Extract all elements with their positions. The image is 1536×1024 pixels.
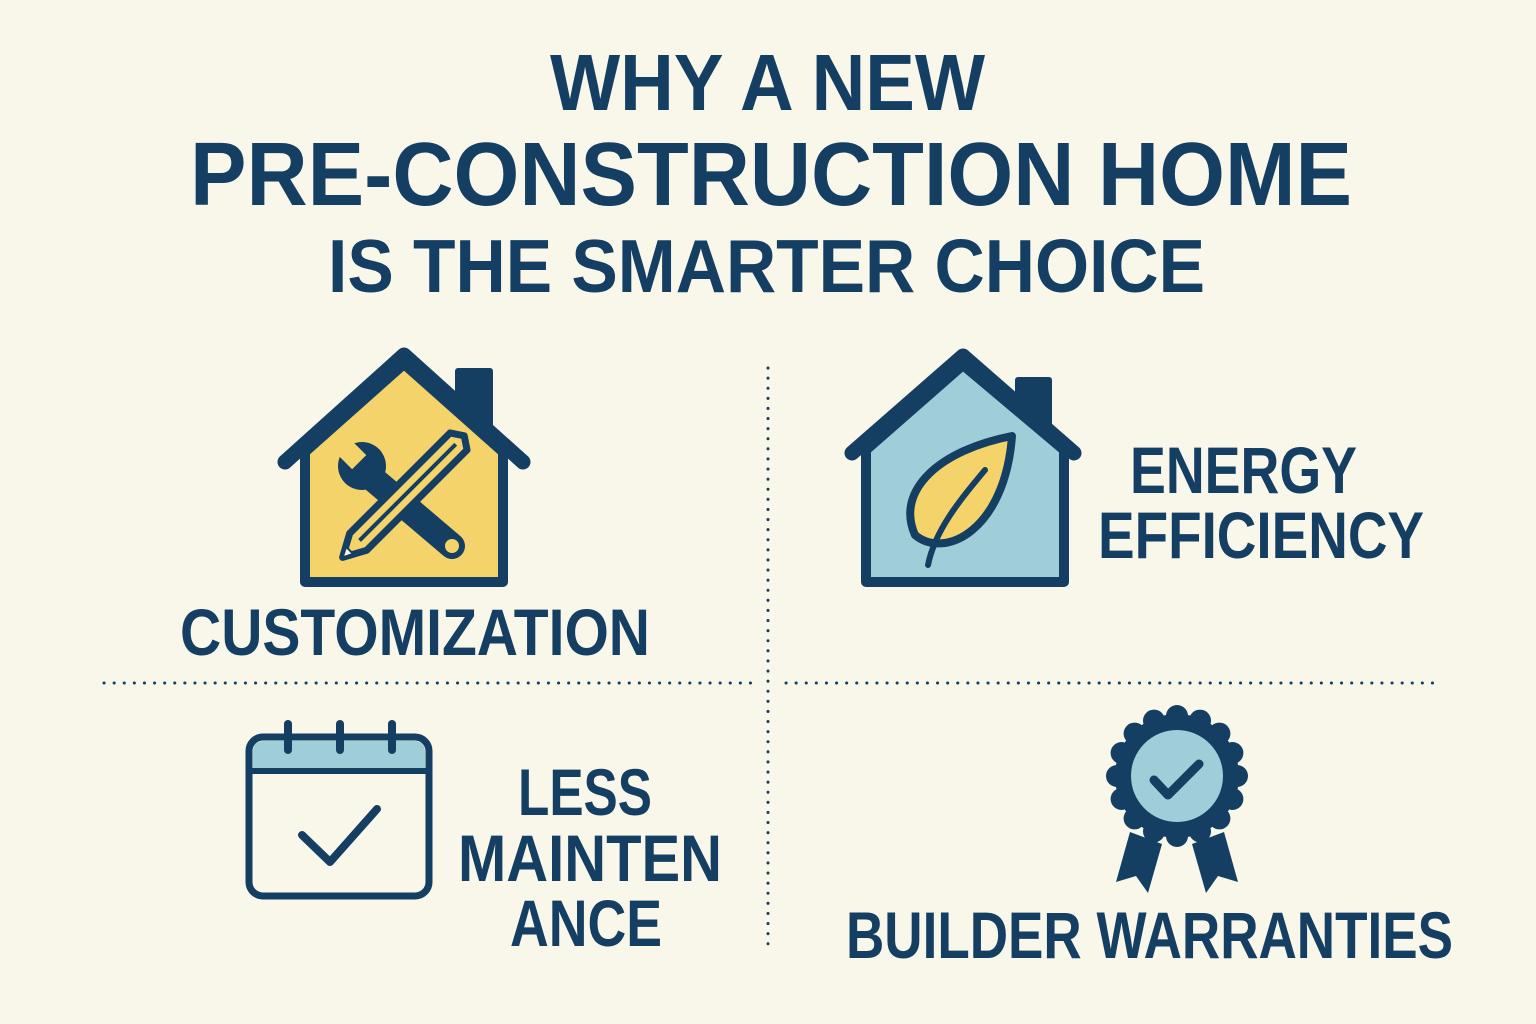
label: energy efficiency: EFFICIENCY: [1098, 498, 1424, 572]
icon: calendar with check: [249, 724, 429, 896]
panel: less maintenance: [249, 724, 722, 960]
panel: customization: [180, 355, 650, 669]
title: WHY A NEW: [550, 38, 985, 127]
icon: house with leaf: [852, 356, 1074, 582]
label: energy efficiency: ENERGY: [1130, 433, 1357, 507]
label: less maintenance: LESS: [518, 755, 652, 829]
icon: award badge: [1106, 705, 1248, 893]
title: [190, 38, 1352, 308]
label: less maintenance: [458, 755, 722, 960]
icon: house with tools: [285, 355, 523, 582]
title: IS THE SMARTER CHOICE: [328, 224, 1205, 308]
label: energy efficiency: [1098, 433, 1424, 572]
panel: builder warranties: [846, 705, 1453, 972]
label: less maintenance: MAINTEN: [458, 821, 722, 895]
panel: energy efficiency: [852, 356, 1424, 582]
label: less maintenance: ANCE: [510, 886, 662, 960]
title: PRE-CONSTRUCTION HOME: [190, 125, 1352, 225]
wrench: [334, 437, 459, 553]
label: customization: CUSTOMIZATION: [180, 595, 650, 669]
